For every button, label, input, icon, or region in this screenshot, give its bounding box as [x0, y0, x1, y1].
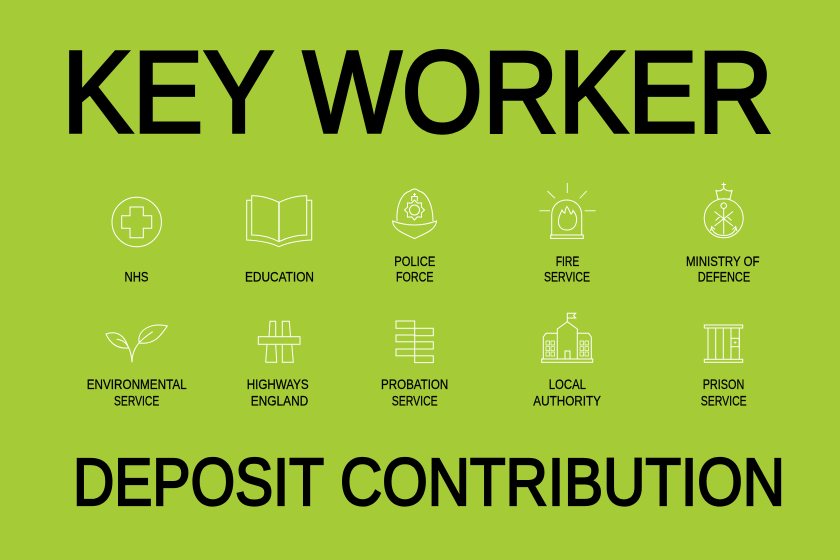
label: highways england	[247, 377, 309, 409]
icon: motorway	[258, 321, 300, 362]
label: prison service: SERVICE	[701, 394, 747, 409]
label: ministry of defence: MINISTRY OF	[686, 254, 760, 269]
icon: probation bars	[396, 321, 433, 363]
label: ministry of defence: DEFENCE	[698, 270, 750, 285]
title: key worker: KEY	[62, 27, 274, 157]
title: deposit contribution	[73, 445, 785, 520]
title: key worker: WORKER	[303, 27, 773, 157]
label: local authority: LOCAL	[549, 377, 586, 392]
icon: prison door	[704, 325, 743, 362]
icon: fire beacon	[539, 183, 596, 238]
title: key worker	[62, 27, 773, 157]
label: police force: POLICE	[394, 254, 435, 269]
label: fire service	[544, 254, 590, 285]
title: deposit contribution: DEPOSIT	[73, 445, 324, 520]
label: police force: FORCE	[396, 270, 434, 285]
label: prison service: PRISON	[703, 377, 744, 392]
label: highways england: ENGLAND	[251, 394, 308, 409]
title: deposit contribution: CONTRIBUTION	[340, 445, 785, 520]
icon: ministry of defence crest	[704, 182, 743, 238]
label: environmental service: ENVIRONMENTAL	[87, 377, 187, 392]
label: NHS: NHS	[124, 270, 148, 285]
label: prison service	[701, 377, 747, 409]
label: fire service: SERVICE	[544, 270, 590, 285]
label: ministry of defence	[686, 254, 760, 285]
icon: plant sprout	[106, 325, 167, 362]
icon: local authority building	[542, 313, 593, 362]
label: education: EDUCATION	[245, 270, 314, 285]
icon: police helmet	[392, 189, 436, 238]
label: probation service: PROBATION	[381, 377, 448, 392]
icon: NHS cross	[112, 197, 161, 247]
label: fire service: FIRE	[556, 254, 579, 269]
label: probation service: SERVICE	[392, 394, 438, 409]
label: environmental service: SERVICE	[114, 394, 159, 409]
label: local authority: AUTHORITY	[533, 394, 601, 409]
label: local authority	[533, 377, 601, 409]
label: highways england: HIGHWAYS	[247, 377, 309, 392]
label: police force	[394, 254, 435, 285]
label: environmental service	[87, 377, 187, 409]
icon: open book	[247, 196, 312, 247]
label: probation service	[381, 377, 448, 409]
